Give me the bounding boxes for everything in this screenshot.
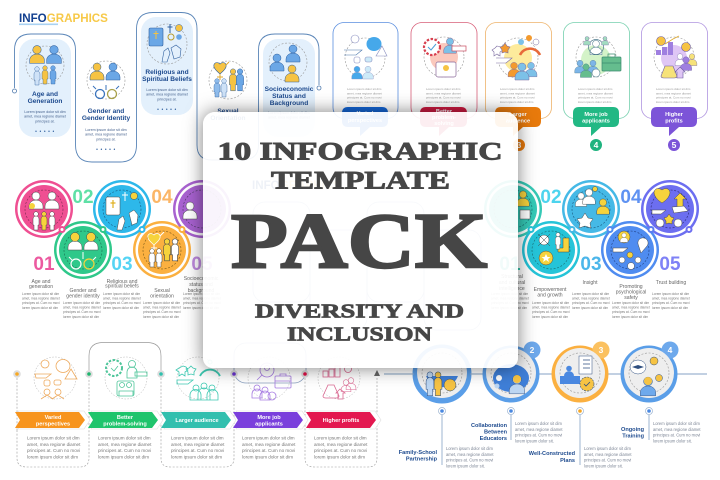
chevron body text: Lorem ipsum dolor sit dim — [98, 436, 151, 440]
card: better problem-solving: problem- — [432, 115, 456, 121]
card: better problem-solving: solving — [434, 121, 454, 127]
circle 2 green — [54, 221, 112, 279]
chevron body text: lorem ipsum dolor sit dim — [98, 454, 149, 459]
column labels and text: Lorem ipsum dolor sit dim — [572, 292, 609, 296]
icon: larger audience — [176, 357, 220, 400]
card: more job applicants: applicants — [582, 118, 610, 124]
numbers: 05 — [191, 254, 213, 275]
timeline captions: amet, mea regione diamet — [515, 427, 563, 432]
column labels and text: principes at. Cum no movi — [183, 301, 221, 305]
column labels and text: lorem ipsum dolor sit dim — [612, 315, 648, 319]
card: more job applicants: principes at. Cum no movi — [578, 96, 613, 100]
faint template behind the title card — [234, 179, 481, 402]
timeline captions: Well-Constructed — [529, 451, 576, 457]
card 1: age and generation: Generation — [28, 98, 62, 105]
title text: DIVERSITY AND — [255, 300, 464, 322]
column labels and text: and cultural — [499, 280, 525, 286]
card 1: age and generation: Age and — [32, 91, 58, 98]
card 4: sexual orientation — [209, 61, 247, 122]
card 3: religious and spiritual beliefs: principes at. — [157, 97, 177, 101]
column labels and text: lorem ipsum dolor sit dim — [63, 315, 99, 319]
chevron body text: amet, mea regione diamet — [171, 442, 225, 447]
chevron: larger audience: Larger audience — [175, 418, 219, 424]
chevron: more job applicants: More job — [257, 415, 281, 421]
column labels and text: Lorem ipsum dolor sit dim — [491, 292, 528, 296]
card: more job applicants — [564, 22, 630, 151]
timeline nodes — [13, 370, 380, 378]
card 2: gender and gender identity: Gender and — [88, 108, 124, 115]
timeline captions: Ongoing — [621, 427, 645, 433]
card: varied perspectives: lorem ipsum dolor sit dim — [347, 100, 381, 104]
card backgrounds — [19, 17, 315, 137]
card 1: age and generation: amet, mea regione diamet — [24, 115, 66, 119]
chevron body text: principes at. Cum no movi — [242, 448, 295, 453]
column labels and text — [491, 274, 690, 319]
card: varied perspectives: principes at. Cum no movi — [347, 96, 382, 100]
chevron: better problem-solving: Better — [117, 415, 134, 421]
circle: well-constructed plans: 3 — [599, 345, 604, 355]
circle 5 purple — [173, 180, 231, 238]
card 3: religious and spiritual beliefs: Lorem ipsum dolor sit dim — [146, 88, 188, 92]
card: varied perspectives — [333, 22, 398, 136]
chevron body text: lorem ipsum dolor sit dim — [171, 454, 222, 459]
column labels and text: amet, mea regione diamet — [63, 306, 101, 310]
card: larger audience: Larger — [509, 112, 528, 118]
chevron: better problem-solving — [88, 411, 163, 429]
card 3: religious and spiritual beliefs: Religious and — [145, 69, 189, 76]
column labels and text: Sexual — [154, 288, 170, 294]
title card — [203, 112, 518, 368]
icon: more job applicants — [248, 357, 291, 400]
card: larger audience — [486, 22, 552, 151]
card 1: age and generation: principes at. — [35, 119, 55, 123]
circle 4 blue — [601, 221, 659, 279]
chevron: better problem-solving: problem-solving — [103, 422, 147, 428]
numbers: 05 — [659, 254, 681, 275]
column labels and text: Lorem ipsum dolor sit dim — [612, 301, 649, 305]
column labels and text: amet, mea regione diamet — [612, 306, 650, 310]
card 2: gender and gender identity — [82, 61, 131, 153]
title text: 10 INFOGRAPHIC — [218, 138, 502, 166]
card 4: sexual orientation: Sexual — [217, 108, 239, 115]
column labels and text: principes at. Cum no movi — [532, 310, 570, 314]
timeline captions: principes at. Cum no movi — [653, 433, 700, 438]
circle 2 cyan — [522, 221, 580, 279]
card: better problem-solving: lorem ipsum dolor sit dim — [426, 100, 460, 104]
chevron body text: principes at. Cum no movi — [171, 448, 224, 453]
column labels and text: principes at. Cum no movi — [143, 310, 181, 314]
card: varied perspectives: Varied — [357, 111, 374, 117]
column labels and text: Lorem ipsum dolor sit dim — [183, 292, 220, 296]
chevron body text — [27, 436, 368, 459]
timeline captions: Partnership — [406, 456, 438, 462]
card: better problem-solving: Better — [436, 109, 453, 115]
chevron body text: Lorem ipsum dolor sit dim — [27, 436, 80, 440]
numbers: 04 — [620, 187, 642, 208]
timeline captions: Lorem ipsum dolor sit dim — [446, 446, 493, 451]
column labels and text: Promoting — [619, 284, 643, 290]
card 5: socioeconomic status and background: Socioeconomic — [265, 86, 314, 93]
column labels and text: orientation — [150, 294, 174, 300]
card 5: socioeconomic status and background: amet, mea regione diamet — [268, 116, 310, 120]
column labels and text: Empowerment — [534, 287, 567, 293]
chevron: more job applicants: applicants — [255, 422, 283, 428]
timeline captions: lorem ipsum dolor sit. — [653, 438, 692, 443]
card: larger audience: principes at. Cum no movi — [500, 96, 535, 100]
column labels and text: principes at. Cum no movi — [491, 301, 529, 305]
card: better problem-solving: amet, mea regione diamet — [426, 91, 461, 95]
chevron body text: lorem ipsum dolor sit dim — [27, 454, 78, 459]
timeline captions: Between — [484, 430, 508, 436]
timeline captions: Family-School — [399, 450, 437, 456]
column labels and text: status and — [189, 282, 213, 288]
connector dots — [528, 227, 692, 232]
numbers: 02 — [540, 187, 562, 208]
chevron body text: Lorem ipsum dolor sit dim — [171, 436, 224, 440]
card 1: age and generation — [24, 46, 66, 135]
card: better problem-solving: principes at. Cum no movi — [426, 96, 461, 100]
card: higher profits: Higher — [665, 112, 684, 118]
card: larger audience: lorem ipsum dolor sit dim — [500, 100, 534, 104]
chevron body text: amet, mea regione diamet — [98, 442, 152, 447]
panel: circles chain left — [15, 180, 231, 319]
circle: collaboration between educators: 2 — [530, 345, 535, 355]
column labels and text: and growth — [537, 292, 563, 298]
card: varied perspectives: amet, mea regione diamet — [347, 91, 382, 95]
icon: better problem-solving — [105, 357, 147, 399]
card: varied perspectives: perspectives — [348, 118, 382, 124]
column labels and text — [22, 276, 221, 319]
chevron body text: amet, mea regione diamet — [27, 442, 81, 447]
column labels and text: background — [188, 288, 214, 294]
timeline captions: Collaboration — [471, 423, 508, 429]
timeline captions: Training — [622, 434, 645, 440]
card: more job applicants: Lorem ipsum dolor sit dim — [578, 87, 612, 91]
card 5: socioeconomic status and background: Status and — [272, 93, 306, 100]
numbers: 01 — [499, 254, 521, 275]
card 3: religious and spiritual beliefs: Spiritual Beliefs — [142, 76, 192, 83]
chevron: higher profits — [306, 411, 381, 429]
column labels and text: spiritual beliefs — [105, 284, 139, 290]
circle: well-constructed plans — [552, 342, 610, 414]
panel: chevron process — [13, 342, 381, 467]
column labels and text: Lorem ipsum dolor sit dim — [652, 292, 689, 296]
numbers — [33, 187, 213, 275]
card 2: gender and gender identity: • • • • • — [96, 147, 116, 153]
logo: INFOGRAPHICS — [19, 12, 108, 25]
card 3: religious and spiritual beliefs: • • • • • — [157, 107, 177, 113]
card 3: religious and spiritual beliefs: amet, mea regione diamet — [146, 93, 188, 97]
card 2: gender and gender identity: Gender Identity — [82, 115, 131, 122]
timeline captions: lorem ipsum dolor sit. — [446, 463, 485, 468]
icon: higher profits — [318, 357, 360, 399]
card 2: gender and gender identity: Lorem ipsum dolor sit dim — [85, 128, 127, 132]
circle 1 teal — [484, 180, 542, 238]
column labels and text: principes at. Cum no movi — [63, 310, 101, 314]
card: larger audience: 3 — [517, 140, 522, 150]
column labels and text: lorem ipsum dolor sit dim — [652, 306, 688, 310]
column labels and text: principes at. Cum no movi — [652, 301, 690, 305]
card: higher profits — [642, 22, 708, 151]
dashed frames — [17, 378, 377, 467]
column labels and text: Lorem ipsum dolor sit dim — [143, 301, 180, 305]
card 5: socioeconomic status and background: Lorem ipsum dolor sit dim — [268, 111, 310, 115]
column labels and text: Insight — [582, 280, 598, 286]
timeline captions: lorem ipsum dolor sit. — [515, 438, 554, 443]
card: higher profits: lorem ipsum dolor sit dim — [656, 100, 690, 104]
card: larger audience: Lorem ipsum dolor sit dim — [500, 87, 534, 91]
column labels and text: gender identity — [66, 294, 100, 300]
column labels and text: principes at. Cum no movi — [612, 310, 650, 314]
timeline captions: amet, mea regione diamet — [446, 452, 494, 457]
circle 4 orange — [133, 221, 191, 279]
card: higher profits: amet, mea regione diamet — [656, 91, 691, 95]
column labels and text: amet, mea regione diamet — [532, 306, 570, 310]
card: better problem-solving: Lorem ipsum dolor sit dim — [426, 87, 460, 91]
card: higher profits: Lorem ipsum dolor sit dim — [656, 87, 690, 91]
timeline captions: Plans — [560, 458, 575, 464]
card 5: socioeconomic status and background — [265, 43, 314, 120]
card: higher profits: 5 — [672, 140, 677, 150]
column labels and text: amet, mea regione diamet — [572, 297, 610, 301]
numbers: 03 — [111, 254, 133, 275]
card: more job applicants: lorem ipsum dolor sit dim — [578, 100, 612, 104]
timeline captions — [399, 421, 701, 468]
connector dots — [60, 227, 184, 232]
chevron body text: principes at. Cum no movi — [27, 448, 80, 453]
column labels and text: intelligence — [499, 286, 525, 292]
circle: ongoing training: 4 — [668, 345, 673, 355]
card: higher profits: profits — [665, 118, 683, 124]
chevron body text: lorem ipsum dolor sit dim — [314, 454, 365, 459]
column labels and text: Lorem ipsum dolor sit dim — [63, 301, 100, 305]
column labels and text: lorem ipsum dolor sit dim — [183, 306, 219, 310]
timeline captions: Lorem ipsum dolor sit dim — [584, 446, 631, 451]
column labels and text: generation — [29, 284, 53, 290]
column labels and text: Gender and — [70, 288, 97, 294]
column labels and text: safety — [624, 295, 638, 301]
card 3: religious and spiritual beliefs — [142, 24, 192, 113]
icon: varied perspectives — [34, 357, 77, 399]
column labels and text: psychological — [616, 290, 646, 296]
column labels and text: amet, mea regione diamet — [652, 297, 690, 301]
chevron body text: principes at. Cum no movi — [98, 448, 151, 453]
card: varied perspectives: Lorem ipsum dolor sit dim — [347, 87, 381, 91]
chevron body text: Lorem ipsum dolor sit dim — [314, 436, 367, 440]
column labels and text: Lorem ipsum dolor sit dim — [103, 292, 140, 296]
panel: circles chain right — [484, 180, 699, 319]
circle 3 blue — [93, 180, 151, 238]
circle 5 violet — [641, 180, 699, 238]
timeline captions: Educators — [480, 436, 507, 442]
column labels and text: Structural — [501, 274, 523, 280]
timeline captions: amet, mea regione diamet — [584, 452, 632, 457]
card 4: sexual orientation: Orientation — [210, 115, 246, 122]
stems — [442, 415, 649, 465]
chevron: varied perspectives: Varied — [45, 415, 62, 421]
panel: vertical cards timeline — [12, 12, 321, 162]
chevron body text: lorem ipsum dolor sit dim — [242, 454, 293, 459]
column labels and text: lorem ipsum dolor sit dim — [532, 315, 568, 319]
circle: ongoing training — [620, 342, 678, 414]
chevron body text: Lorem ipsum dolor sit dim — [242, 436, 295, 440]
card: more job applicants: amet, mea regione diamet — [578, 91, 613, 95]
title text: PACK — [231, 197, 487, 284]
numbers: 03 — [580, 254, 602, 275]
circle: collaboration between educators — [482, 342, 540, 414]
solid top frame — [89, 342, 161, 371]
timeline captions: principes at. Cum no movi — [446, 458, 493, 463]
column labels and text: principes at. Cum no movi — [22, 301, 60, 305]
column labels and text: amet, mea regione diamet — [183, 297, 221, 301]
card: better problem-solving — [411, 22, 477, 136]
column labels and text: lorem ipsum dolor sit dim — [22, 306, 58, 310]
column labels and text: principes at. Cum no movi — [103, 301, 141, 305]
column labels and text: principes at. Cum no movi — [572, 301, 610, 305]
timeline captions: principes at. Cum no movi — [515, 433, 562, 438]
card 2: gender and gender identity: amet, mea regione diamet — [85, 133, 127, 137]
panel: speech bubble cards — [333, 22, 708, 151]
column labels and text: lorem ipsum dolor sit dim — [103, 306, 139, 310]
column labels and text: Socioeconomic — [184, 276, 219, 282]
column labels and text: lorem ipsum dolor sit dim — [572, 306, 608, 310]
column labels and text: lorem ipsum dolor sit dim — [143, 315, 179, 319]
chevron: higher profits: Higher profits — [323, 418, 359, 424]
circle 1 pink — [15, 180, 73, 238]
card 5: socioeconomic status and background: Background — [270, 100, 308, 107]
column labels and text: amet, mea regione diamet — [491, 297, 529, 301]
numbers: 01 — [33, 254, 55, 275]
title text: TEMPLATE — [271, 168, 450, 194]
chevron: larger audience — [161, 411, 236, 429]
chevron: more job applicants — [233, 411, 308, 429]
column labels and text: Lorem ipsum dolor sit dim — [22, 292, 59, 296]
chevron body text: principes at. Cum no movi — [314, 448, 367, 453]
timeline captions: amet, mea regione diamet — [653, 427, 701, 432]
card: higher profits: principes at. Cum no movi — [656, 96, 691, 100]
card outline path — [14, 12, 319, 162]
card: more job applicants: 4 — [594, 140, 599, 150]
timeline captions: Lorem ipsum dolor sit dim — [515, 421, 562, 426]
card 1: age and generation: • • • • • — [35, 129, 55, 135]
timeline captions: lorem ipsum dolor sit. — [584, 463, 623, 468]
numbers — [499, 187, 681, 275]
numbers: 02 — [72, 187, 94, 208]
column labels and text: amet, mea regione diamet — [22, 297, 60, 301]
numbers: 04 — [151, 187, 173, 208]
card: more job applicants: More job — [584, 112, 608, 118]
column labels and text: Lorem ipsum dolor sit dim — [532, 301, 569, 305]
column labels and text: Religious and — [107, 279, 138, 285]
card 2: gender and gender identity: principes at. — [96, 137, 116, 141]
faint template behind the title card: INFOGRAPHICS — [252, 179, 341, 192]
title text: INCLUSION — [287, 324, 433, 346]
card: larger audience: amet, mea regione diamet — [500, 91, 535, 95]
timeline captions: Lorem ipsum dolor sit dim — [653, 421, 700, 426]
column labels and text: Trust building — [656, 280, 686, 286]
card: larger audience: audience — [506, 118, 530, 124]
column labels and text: amet, mea regione diamet — [143, 306, 181, 310]
circle: family-school partnership — [414, 346, 470, 414]
chevron: varied perspectives: perspectives — [36, 422, 70, 428]
timeline captions: principes at. Cum no movi — [584, 458, 631, 463]
circle 3 sky — [562, 180, 620, 238]
card 1: age and generation: Lorem ipsum dolor sit dim — [24, 110, 66, 114]
chevron body text: amet, mea regione diamet — [242, 442, 296, 447]
column labels and text: lorem ipsum dolor sit dim — [491, 306, 527, 310]
panel: horizontal timeline with circles — [384, 342, 707, 468]
column labels and text: Age and — [32, 279, 51, 285]
column labels and text: amet, mea regione diamet — [103, 297, 141, 301]
chevron: varied perspectives — [15, 411, 90, 429]
chevron body text: amet, mea regione diamet — [314, 442, 368, 447]
